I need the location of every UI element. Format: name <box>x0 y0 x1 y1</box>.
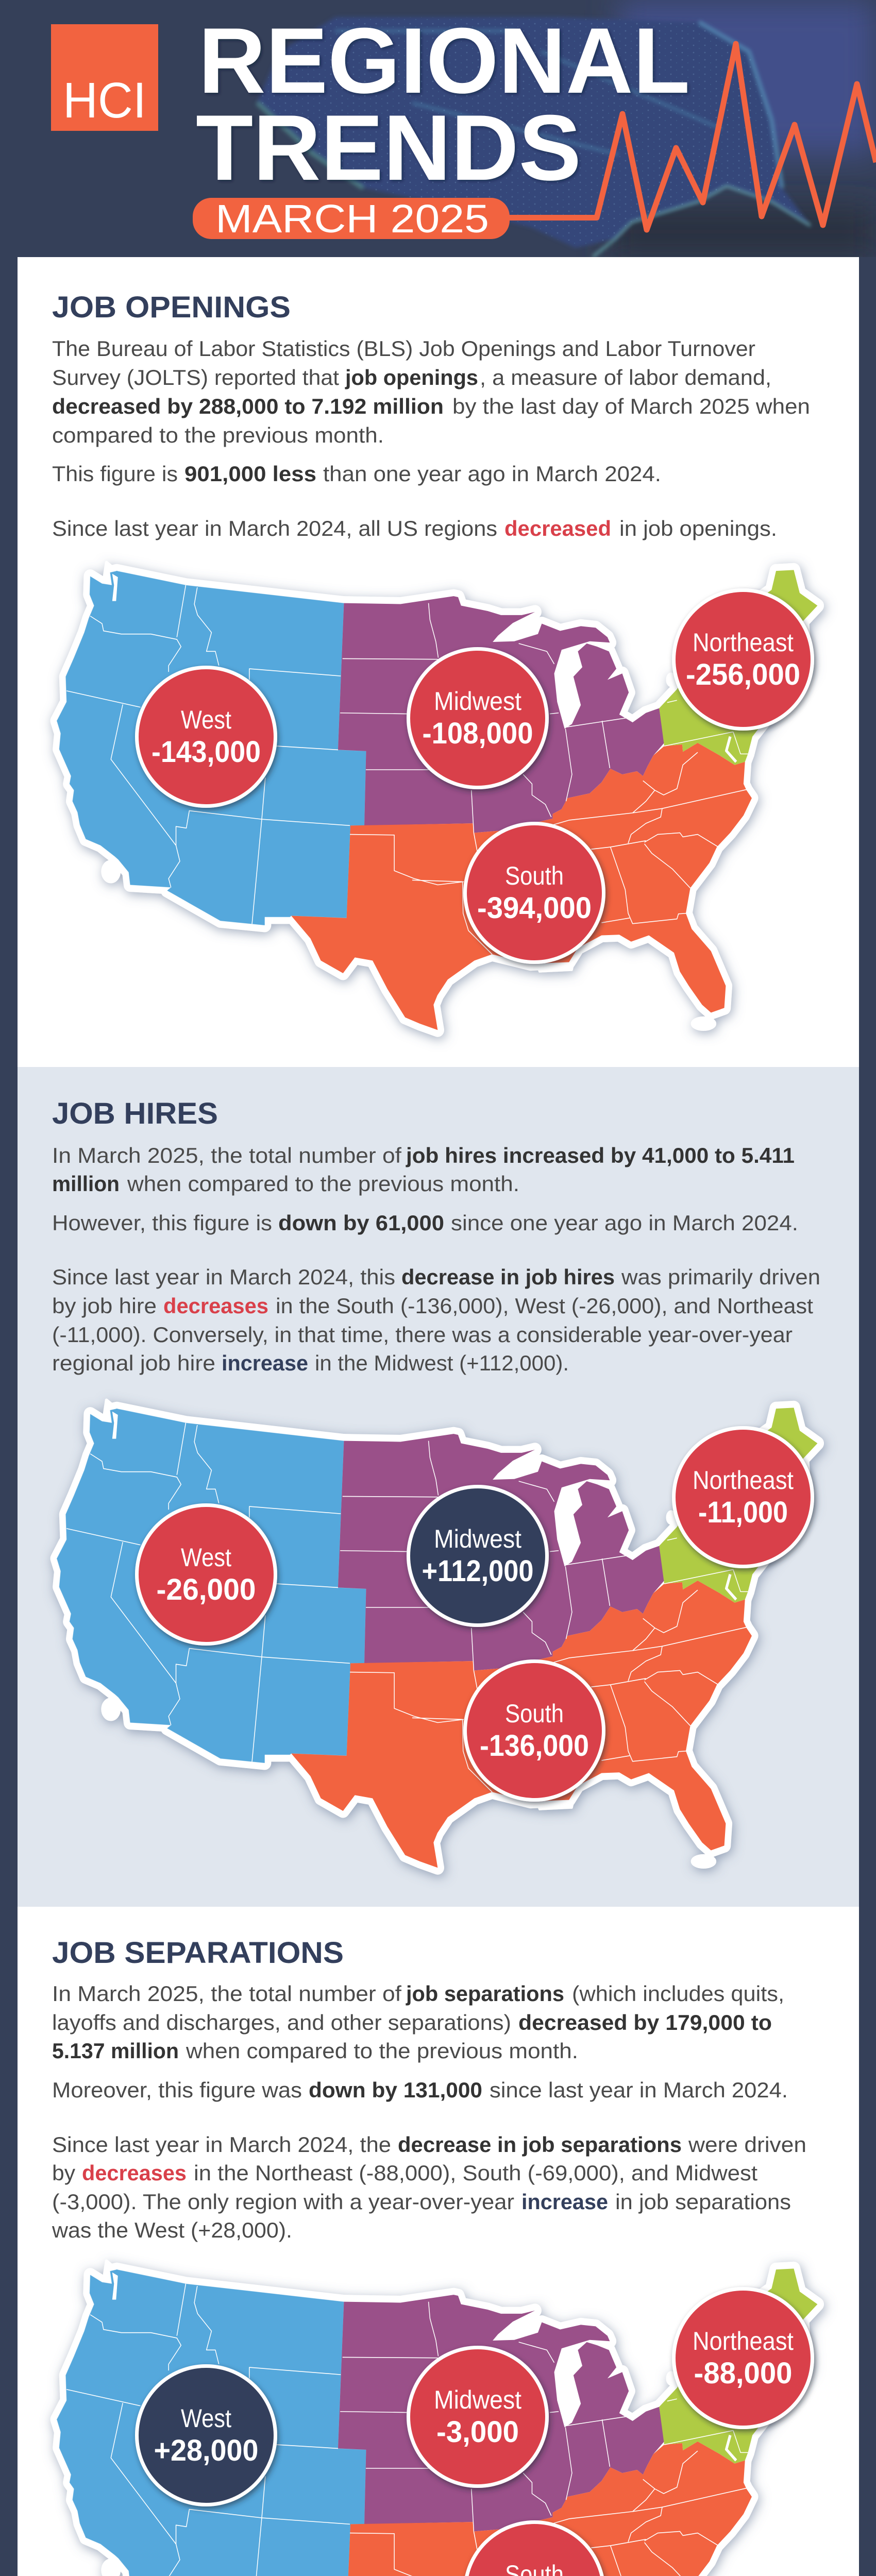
callout: West: West <box>181 2404 231 2433</box>
region: South <box>291 2442 752 2576</box>
text block: job hires intro: In March 2025, the total number of <box>52 1143 401 1167</box>
text block: year over year: down by 61,000 <box>278 1211 444 1235</box>
region: Northeast <box>659 570 817 765</box>
text block: job separations intro: when compared to the previous month. <box>186 2039 578 2063</box>
region: West <box>57 571 366 925</box>
text block: job separations intro: decreased by 179,000 to <box>518 2010 772 2035</box>
region: Midwest <box>338 2295 664 2531</box>
text block: regional summary: increase <box>521 2190 608 2214</box>
trend line <box>508 44 876 230</box>
text block: year over year: since one year ago in March 2024. <box>451 1211 798 1235</box>
text block: year over year: 901,000 less <box>184 462 316 486</box>
text block: regional summary: in the Northeast (-88,000), South (-69,000), and Midwest <box>194 2161 757 2185</box>
text block: year over year: than one year ago in March 2024. <box>323 462 661 486</box>
text block: job openings intro: compared to the previous month. <box>52 423 384 447</box>
callout: Northeast: -256,000 <box>686 658 800 691</box>
callout: Northeast <box>672 588 814 731</box>
logo: HCI <box>51 24 158 131</box>
text block: year over year: Moreover, this figure was <box>52 2078 302 2102</box>
text block: job separations intro: In March 2025, the total number of <box>52 1981 401 2006</box>
region: West <box>57 2269 366 2576</box>
text block: year over year <box>52 462 661 486</box>
text block: regional summary: increase <box>222 1351 308 1375</box>
title <box>196 9 690 200</box>
text block: regional summary: in the South (-136,000), West (-26,000), and Northeast <box>276 1294 813 1318</box>
text block: job hires intro <box>52 1143 795 1196</box>
region: Northeast <box>659 2268 817 2464</box>
callout: Northeast: Northeast <box>693 628 794 657</box>
text block: regional summary: Since last year in March 2024, all US regions <box>52 516 497 540</box>
panel: job openings <box>18 257 859 1067</box>
date pill: MARCH 2025 <box>215 197 489 241</box>
text block: regional summary <box>52 2132 806 2242</box>
map: job openings by region <box>57 563 817 1030</box>
callout: South: -394,000 <box>477 891 592 925</box>
text block: regional summary: (-3,000). The only region with a year-over-year <box>52 2190 514 2214</box>
callout: Northeast <box>672 2287 814 2429</box>
callout: Midwest: -3,000 <box>436 2415 519 2449</box>
callout: West <box>135 666 277 808</box>
text block: job openings intro: job openings <box>345 365 478 389</box>
text block: year over year <box>52 2078 788 2102</box>
map: job separations by region <box>57 2261 817 2576</box>
callout: Midwest <box>407 647 549 789</box>
callout: Northeast: -88,000 <box>694 2357 793 2390</box>
text block: regional summary: was primarily driven <box>621 1265 820 1289</box>
callout: South <box>463 822 605 964</box>
text block: job openings intro: The Bureau of Labor Statistics (BLS) Job Openings and Labor Turnover <box>52 336 755 361</box>
text block: year over year: down by 131,000 <box>309 2078 482 2102</box>
heading: JOB OPENINGS <box>52 291 291 324</box>
text block: job separations intro: layoffs and discharges, and other separations) <box>52 2010 511 2035</box>
text block: year over year <box>52 1211 798 1235</box>
text block: job openings intro: by the last day of March 2025 when <box>452 394 810 418</box>
callout: Midwest: Midwest <box>434 687 521 716</box>
callout: Northeast: Northeast <box>693 2327 794 2355</box>
callout: Midwest: Midwest <box>434 2385 521 2414</box>
callout: West <box>135 1503 277 1646</box>
callout: South <box>463 2520 605 2576</box>
title: REGIONAL <box>198 9 690 113</box>
callout: Midwest: +112,000 <box>422 1554 534 1588</box>
panel: job separations <box>18 1907 859 2576</box>
text block: job openings intro: decreased by 288,000 to 7.192 million <box>52 394 444 418</box>
heading: JOB SEPARATIONS <box>52 1936 344 1970</box>
panel: job hires <box>18 1067 859 1907</box>
text block: regional summary: decrease in job hires <box>401 1265 615 1289</box>
region: Midwest <box>338 1434 664 1670</box>
title: TRENDS <box>196 96 581 200</box>
logo: HCI: HCI <box>63 72 146 128</box>
header banner <box>51 0 876 257</box>
region: Midwest <box>338 596 664 833</box>
text block: regional summary: by job hire <box>52 1294 157 1318</box>
text block: regional summary: in the Midwest (+112,000). <box>315 1351 569 1375</box>
callout: West: West <box>181 705 231 734</box>
text block: regional summary: were driven <box>688 2132 806 2157</box>
text block: regional summary: decreases <box>163 1294 268 1318</box>
callout: Northeast: Northeast <box>693 1466 794 1495</box>
callout: West: West <box>181 1543 231 1572</box>
text block: job separations intro <box>52 1981 784 2063</box>
text block: regional summary <box>52 516 777 540</box>
text block: regional summary: was the West (+28,000). <box>52 2218 292 2242</box>
heading: JOB HIRES <box>52 1097 218 1130</box>
callout: Northeast <box>672 1426 814 1568</box>
text block: regional summary: (-11,000). Conversely, in that time, there was a considerable year-over-year <box>52 1323 793 1347</box>
callout: Midwest <box>407 1485 549 1627</box>
text block: job hires intro: when compared to the previous month. <box>127 1172 519 1196</box>
text block: year over year: This figure is <box>52 462 178 486</box>
text block: job openings intro: Survey (JOLTS) reported that <box>52 365 339 389</box>
text block: regional summary: decreases <box>82 2161 187 2185</box>
callout: West: -143,000 <box>151 735 261 769</box>
region: South <box>291 1581 752 1868</box>
region: South <box>291 743 752 1030</box>
text block: year over year: since last year in March 2024. <box>490 2078 788 2102</box>
header background image <box>257 0 876 257</box>
callout: West: +28,000 <box>154 2434 259 2467</box>
callout: Midwest <box>407 2346 549 2488</box>
text block: job separations intro: 5.137 million <box>52 2039 179 2063</box>
text block: regional summary: decrease in job separations <box>398 2132 682 2157</box>
text block: regional summary: in job openings. <box>619 516 777 540</box>
text block: job openings intro: , a measure of labor demand, <box>480 365 771 389</box>
text block: job hires intro: million <box>52 1172 120 1196</box>
callout: South <box>463 1659 605 1802</box>
text block: regional summary: Since last year in March 2024, the <box>52 2132 391 2157</box>
region: Northeast <box>659 1408 817 1603</box>
callout: Midwest: -108,000 <box>423 717 533 750</box>
callout: West <box>135 2364 277 2506</box>
text block: job hires intro: job hires increased by 41,000 to 5.411 <box>406 1143 795 1167</box>
text block: year over year: However, this figure is <box>52 1211 272 1235</box>
callout: South: South <box>505 861 564 890</box>
text block: regional summary: regional job hire <box>52 1351 215 1375</box>
text block: regional summary <box>52 1265 820 1375</box>
callout: West: -26,000 <box>157 1573 256 1606</box>
callout: South: -136,000 <box>480 1729 589 1762</box>
text block: regional summary: in job separations <box>615 2190 791 2214</box>
text block: job separations intro: (which includes quits, <box>572 1981 784 2006</box>
text block: regional summary: decreased <box>504 516 611 540</box>
map: job hires by region <box>57 1400 817 1868</box>
callout: Northeast: -11,000 <box>698 1496 788 1529</box>
text block: regional summary: Since last year in March 2024, this <box>52 1265 395 1289</box>
text block: job separations intro: job separations <box>406 1981 564 2006</box>
callout: South: South <box>505 1699 564 1728</box>
text block: job openings intro <box>52 336 810 447</box>
region: West <box>57 1409 366 1763</box>
text block: regional summary: by <box>52 2161 75 2185</box>
callout: Midwest: Midwest <box>434 1524 521 1553</box>
